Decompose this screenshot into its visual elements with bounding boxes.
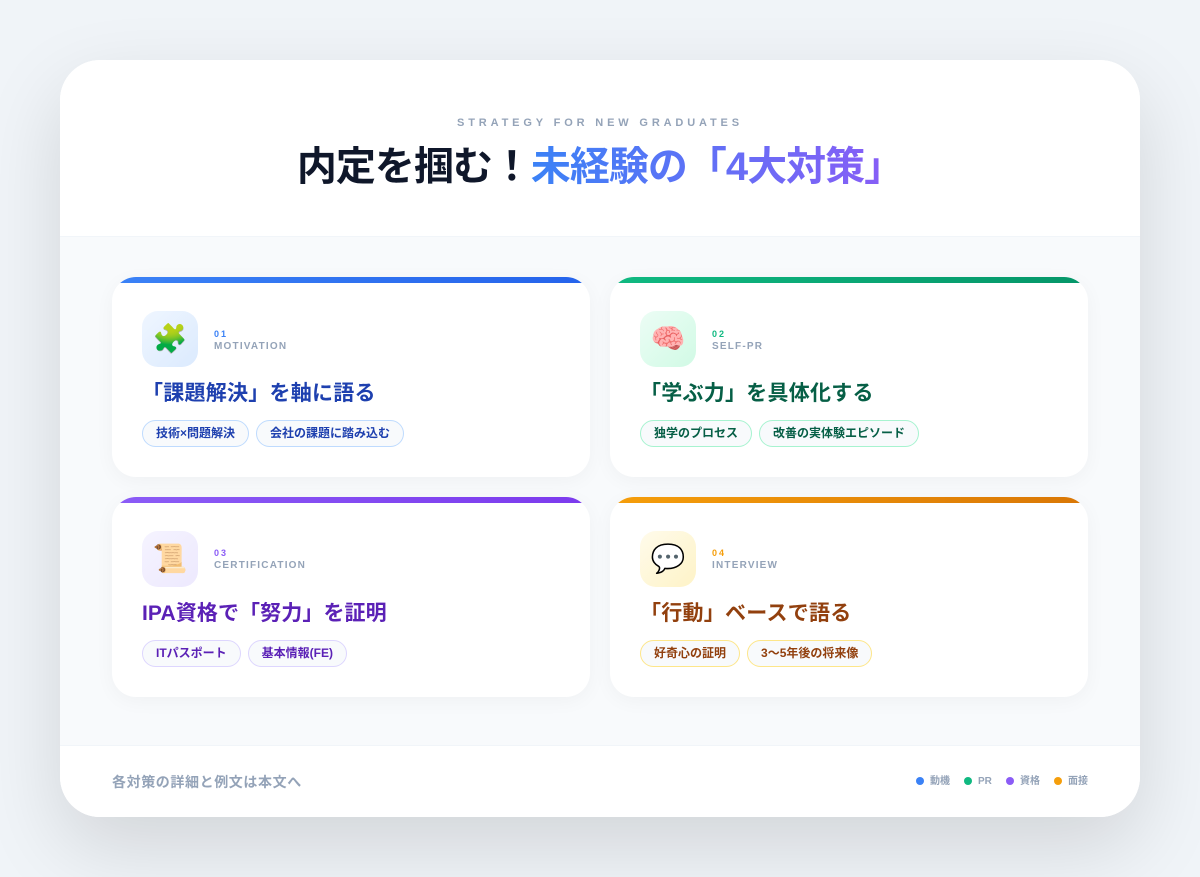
category: motivation: MOTIVATION (214, 341, 287, 352)
category: interview: INTERVIEW (712, 560, 778, 571)
icon: scroll: 📜 (153, 542, 187, 575)
tag: 会社の課題に踏み込む (270, 426, 390, 440)
strategy cards area (60, 237, 1140, 745)
tags (640, 420, 919, 447)
panel: motivation (112, 277, 590, 477)
title: 内定を掴む！未経験の「4大対策」 (297, 145, 903, 189)
tag: 独学のプロセス (654, 426, 738, 440)
icon: puzzle piece (142, 311, 198, 367)
accent bar: green (610, 277, 1088, 283)
accent bar: blue (112, 277, 590, 283)
panel: interview (610, 497, 1088, 697)
legend item: interview: 面接 (1068, 776, 1088, 787)
tags (142, 640, 347, 667)
tag: 技術×問題解決 (156, 426, 235, 440)
legend item: motivation (916, 775, 950, 787)
panel: certification (112, 497, 590, 697)
footer note: 各対策の詳細と例文は本文へ (112, 774, 302, 790)
tag (248, 640, 347, 667)
legend item: motivation: 動機 (930, 776, 950, 787)
icon: brain (640, 311, 696, 367)
accent bar: purple (112, 497, 590, 503)
number 02: 02 (712, 329, 726, 339)
number 04: 04 (712, 548, 726, 558)
icon: speech bubble (640, 531, 696, 587)
tag: 3〜5年後の将来像 (761, 646, 858, 660)
number 03: 03 (214, 548, 228, 558)
legend item: certification (1006, 775, 1040, 787)
tag: 改善の実体験エピソード (773, 426, 905, 440)
eyebrow label: STRATEGY FOR NEW GRADUATES (457, 117, 743, 129)
accent bar: amber (610, 497, 1088, 503)
legend item: interview (1054, 775, 1088, 787)
footer (60, 745, 1140, 817)
card heading: 「課題解決」を軸に語る (142, 382, 376, 405)
legend item: certification: 資格 (1020, 776, 1040, 787)
tag: 好奇心の証明 (654, 646, 726, 660)
main card (60, 60, 1140, 817)
icon: speech bubble: 💬 (651, 542, 685, 575)
icon: scroll (142, 531, 198, 587)
tag: 基本情報(FE) (262, 646, 333, 660)
tag (759, 420, 919, 447)
tag (640, 420, 752, 447)
legend item: pr: PR (978, 776, 992, 787)
number 01: 01 (214, 329, 228, 339)
tag: ITパスポート (156, 646, 227, 660)
header (60, 60, 1140, 237)
tag (640, 640, 740, 667)
tag (142, 420, 249, 447)
tag (256, 420, 404, 447)
icon: puzzle piece: 🧩 (153, 322, 187, 355)
card heading: 「行動」ベースで語る (640, 602, 851, 625)
tags (142, 420, 404, 447)
legend (916, 775, 1088, 787)
tag (142, 640, 241, 667)
legend item: pr (964, 776, 992, 787)
card heading: IPA資格で「努力」を証明 (142, 602, 387, 625)
tags (640, 640, 872, 667)
tag (747, 640, 872, 667)
category: certification: CERTIFICATION (214, 560, 306, 571)
card heading: 「学ぶ力」を具体化する (640, 382, 874, 405)
panel: self-pr (610, 277, 1088, 477)
icon: brain: 🧠 (651, 322, 685, 355)
category: self-pr: SELF-PR (712, 341, 763, 352)
